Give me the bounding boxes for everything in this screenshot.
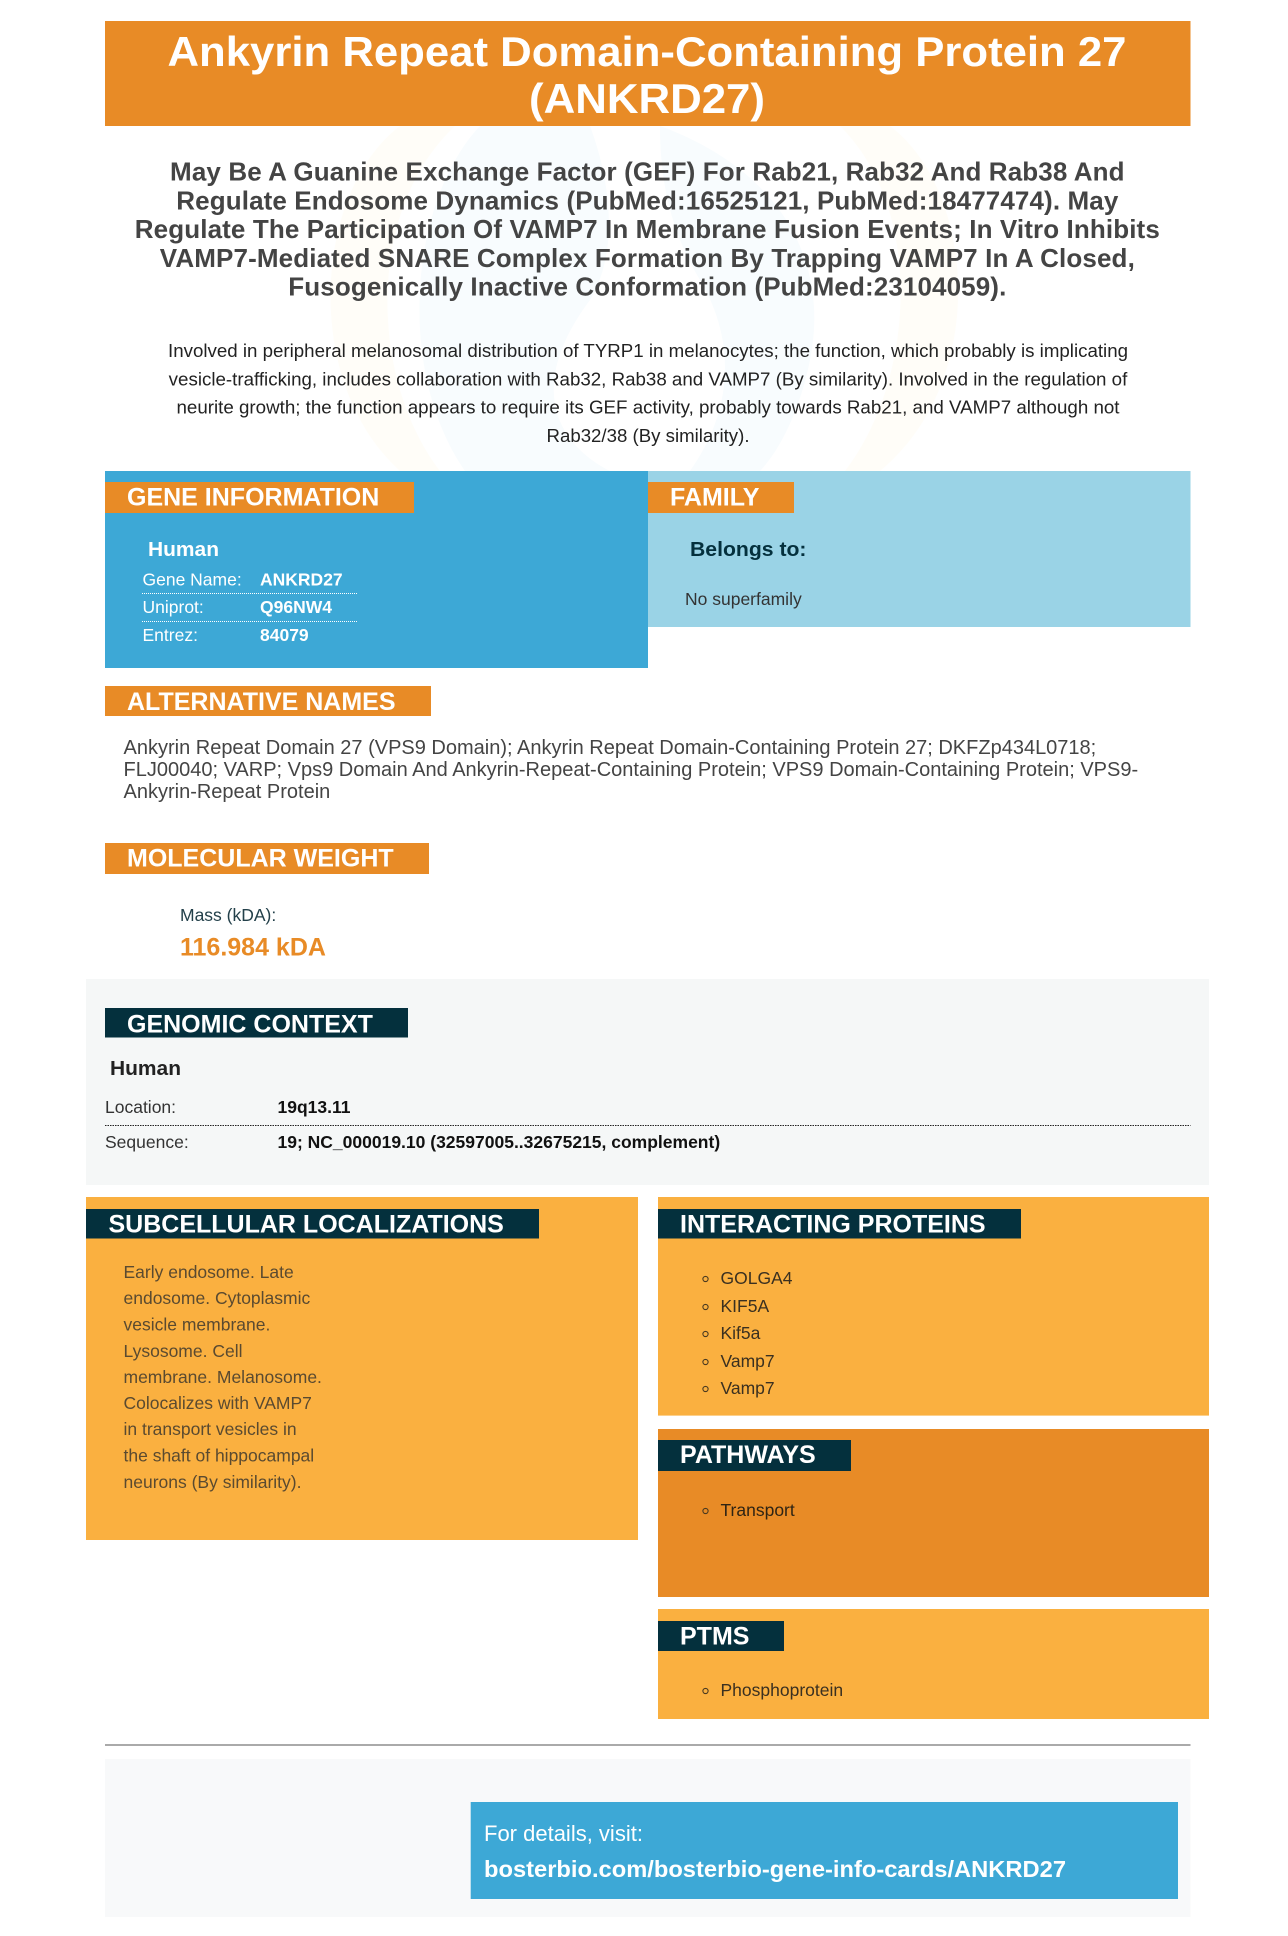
subtitle: function summary: VAMP7-Mediated SNARE Complex Formation By Trapping VAMP7 In A Closed, (160, 243, 1135, 273)
heading: family (648, 482, 794, 513)
protein list: GOLGA4 (720, 1268, 793, 1288)
gene identifiers table: Entrez: (142, 625, 198, 645)
gene identifiers table: Uniprot: (142, 597, 204, 617)
heading: ptms: PTMS (680, 1622, 749, 1650)
title banner: Ankyrin Repeat Domain-Containing Protein 27 (168, 28, 1126, 75)
gene identifiers table: Gene Name: (142, 570, 242, 590)
protein list: Vamp7 (720, 1351, 775, 1371)
gene identifiers table (142, 570, 357, 645)
sequence row: 19; NC_000019.10 (32597005..32675215, complement) (278, 1132, 720, 1152)
molecular weight value (180, 905, 326, 962)
panel: footer (105, 1759, 1190, 1917)
callout: details link (471, 1802, 1178, 1899)
heading: gene information: GENE INFORMATION (127, 484, 379, 512)
alternative names text: Ankyrin Repeat Domain 27 (VPS9 Domain); Ankyrin Repeat Domain-Containing Protein 27; DKFZp434L0718; (124, 737, 1096, 759)
belongs to label: Belongs to: (690, 538, 806, 561)
species label: Human (110, 1057, 181, 1080)
subtitle: function summary: May Be A Guanine Exchange Factor (GEF) For Rab21, Rab32 And Rab38 And (170, 157, 1125, 187)
location row (105, 1097, 351, 1117)
pathway list: Transport (720, 1500, 795, 1520)
molecular weight value: Mass (kDA): (180, 905, 276, 925)
localization text: Colocalizes with VAMP7 (124, 1393, 312, 1413)
panel: genomic context (86, 979, 1209, 1185)
subtitle: function summary: Regulate The Participation Of VAMP7 In Membrane Fusion Events; In Vitro Inhibits (135, 214, 1160, 244)
title banner: (ANKRD27) (529, 75, 765, 122)
localization text: neurons (By similarity). (124, 1472, 301, 1492)
alternative names text: FLJ00040; VARP; Vps9 Domain And Ankyrin-Repeat-Containing Protein; VPS9 Domain-Containing Protein; VPS9- (124, 759, 1138, 781)
alternative names text: Ankyrin-Repeat Protein (124, 781, 330, 803)
localization text: membrane. Melanosome. (124, 1367, 322, 1387)
protein list (703, 1268, 793, 1398)
description text (168, 340, 1128, 446)
subtitle: function summary: Fusogenically Inactive Conformation (PubMed:23104059). (288, 272, 1006, 302)
localization text: in transport vesicles in (124, 1419, 297, 1439)
gene identifiers table: 84079 (260, 625, 309, 645)
subtitle: function summary: Regulate Endosome Dynamics (PubMed:16525121, PubMed:18477474). May (176, 186, 1119, 216)
localization text: the shaft of hippocampal (124, 1446, 314, 1466)
callout: details link: bosterbio.com/bosterbio-gene-info-cards/ANKRD27 (484, 1856, 1066, 1882)
sequence row: Sequence: (105, 1132, 189, 1152)
heading: alternative names: ALTERNATIVE NAMES (127, 688, 396, 716)
panel: gene information (105, 471, 648, 668)
callout: details link: For details, visit: (484, 1821, 643, 1846)
description text: vesicle-trafficking, includes collaboration with Rab32, Rab38 and VAMP7 (By similarity). Involved in the regulation of (169, 368, 1128, 390)
species label: Human (148, 538, 219, 561)
panel: interacting proteins (658, 1197, 1209, 1416)
panel: family (648, 471, 1190, 627)
subtitle: function summary (135, 157, 1160, 302)
watermark logo (331, 126, 958, 471)
title banner (105, 21, 1190, 126)
protein list: Kif5a (720, 1323, 761, 1343)
heading: molecular weight: MOLECULAR WEIGHT (127, 845, 394, 873)
heading: pathways (658, 1440, 851, 1471)
localization text: Lysosome. Cell (124, 1341, 242, 1361)
alternative names text (124, 737, 1138, 803)
localization text: Early endosome. Late (124, 1262, 294, 1282)
family value: No superfamily (685, 589, 802, 609)
description text: Rab32/38 (By similarity). (546, 425, 750, 446)
localization text: endosome. Cytoplasmic (124, 1288, 310, 1308)
localization text: vesicle membrane. (124, 1314, 270, 1334)
molecular weight value: 116.984 kDA (180, 934, 326, 962)
gene identifiers table: ANKRD27 (260, 570, 343, 590)
heading: interacting proteins: INTERACTING PROTEINS (680, 1211, 986, 1239)
description text: neurite growth; the function appears to require its GEF activity, probably towards Rab21, and VAMP7 although not (176, 396, 1120, 418)
description text: Involved in peripheral melanosomal distribution of TYRP1 in melanocytes; the function, which probably is implicating (168, 340, 1128, 361)
localization text (124, 1262, 322, 1492)
protein list: KIF5A (720, 1296, 769, 1316)
heading: genomic context: GENOMIC CONTEXT (127, 1010, 373, 1038)
location row: Location: (105, 1097, 176, 1117)
ptm list: Phosphoprotein (720, 1680, 843, 1700)
gene identifiers table: Q96NW4 (260, 597, 332, 617)
heading: subcellular localizations: SUBCELLULAR LOCALIZATIONS (108, 1211, 504, 1239)
protein list: Vamp7 (720, 1378, 775, 1398)
heading: ptms (658, 1621, 784, 1651)
panel: subcellular localizations (86, 1197, 638, 1540)
location row: 19q13.11 (278, 1097, 351, 1117)
heading: pathways: PATHWAYS (680, 1441, 816, 1469)
heading: family: FAMILY (670, 484, 760, 512)
panel: pathways (658, 1429, 1209, 1597)
panel: ptms (658, 1609, 1209, 1719)
